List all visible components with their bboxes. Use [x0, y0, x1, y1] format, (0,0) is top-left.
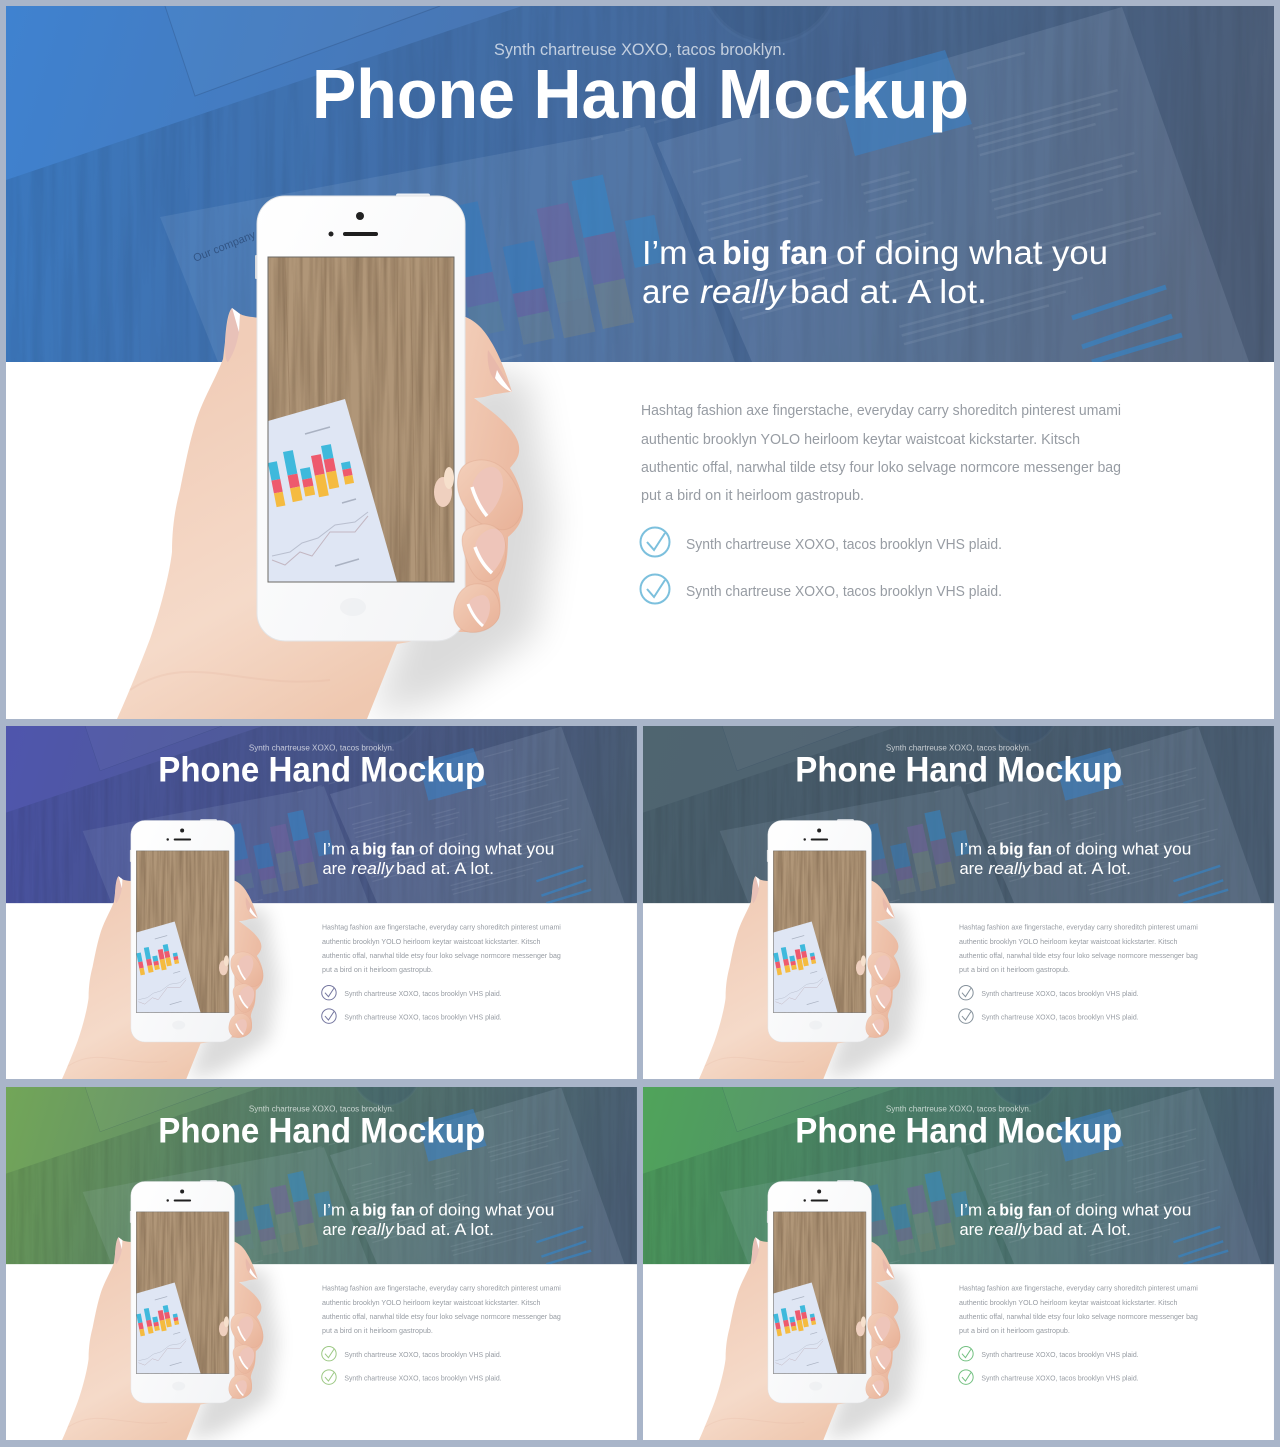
header band: blue gradient: [6, 6, 1274, 362]
fingers: [866, 952, 900, 1038]
header band: olive green gradient: [6, 1087, 637, 1264]
quote heading: big fan: [722, 234, 828, 271]
quote heading: are: [642, 273, 690, 310]
quote heading: bad at. A lot.: [1033, 1221, 1131, 1239]
quote heading: big fan: [362, 840, 415, 858]
body paragraph: authentic offal, narwhal tilde etsy four loko selvage normcore messenger bag: [322, 1312, 561, 1321]
quote heading: bad at. A lot.: [1033, 860, 1131, 878]
checklist item 1: Synth chartreuse XOXO, tacos brooklyn VHS plaid.: [344, 989, 502, 998]
quote heading: bad at. A lot.: [790, 273, 987, 310]
background photo: [643, 726, 1274, 904]
quote heading: big fan: [362, 1201, 415, 1219]
body paragraph: [322, 1284, 561, 1335]
icon: fingers in front: [454, 460, 522, 632]
body paragraph: Hashtag fashion axe fingerstache, everyday carry shoreditch pinterest umami: [641, 403, 1121, 419]
fingers: [229, 1313, 263, 1399]
panel: slate slide: [643, 726, 1274, 1079]
panel: purple slide: [6, 726, 637, 1079]
hand holding back: [61, 1237, 278, 1442]
checklist item 1: [322, 1346, 502, 1361]
title: Phone Hand Mockup: [795, 751, 1122, 790]
document label: Our company: [192, 229, 258, 265]
panel: olive green slide: [6, 1038, 637, 1442]
hand holding back: [698, 876, 915, 1081]
white slide base: [6, 1087, 637, 1442]
quote heading: are: [959, 1221, 983, 1239]
body paragraph: Hashtag fashion axe fingerstache, everyday carry shoreditch pinterest umami: [322, 923, 561, 932]
quote heading: [322, 1201, 554, 1239]
quote heading: bad at. A lot.: [396, 860, 494, 878]
white slide base: [6, 362, 1274, 719]
hand holding back: [61, 876, 278, 1081]
quote heading: of doing what you: [419, 840, 554, 858]
body paragraph: put a bird on it heirloom gastropub.: [959, 965, 1070, 974]
body paragraph: [322, 923, 561, 974]
header band: slate gradient: [643, 726, 1274, 903]
body paragraph: put a bird on it heirloom gastropub.: [322, 1326, 433, 1335]
body paragraph: authentic offal, narwhal tilde etsy four loko selvage normcore messenger bag: [959, 1312, 1198, 1321]
quote heading: big fan: [999, 840, 1052, 858]
subtitle: Synth chartreuse XOXO, tacos brooklyn.: [886, 742, 1031, 752]
phone: [130, 819, 234, 1042]
title: Phone Hand Mockup: [158, 1112, 485, 1151]
checklist item 2: [959, 1009, 1139, 1023]
checklist item 2: [322, 1009, 502, 1023]
quote heading: of doing what you: [419, 1201, 554, 1219]
body paragraph: put a bird on it heirloom gastropub.: [641, 488, 864, 504]
checklist item 2: [322, 1370, 502, 1384]
quote heading: I’m a: [959, 840, 997, 858]
quote heading: [322, 840, 554, 878]
body paragraph: Hashtag fashion axe fingerstache, everyday carry shoreditch pinterest umami: [959, 1284, 1198, 1293]
white slide base: [643, 903, 1274, 1079]
quote heading: I’m a: [322, 840, 360, 858]
quote heading: really: [351, 1221, 396, 1239]
title: Phone Hand Mockup: [312, 55, 969, 133]
panel: main blue slide: [6, 0, 1274, 719]
quote heading: of doing what you: [836, 234, 1108, 271]
quote heading: [642, 234, 1108, 310]
quote heading: I’m a: [959, 1201, 997, 1219]
background photo: [6, 726, 637, 904]
quote heading: [959, 840, 1191, 878]
checklist item 1: [322, 985, 502, 1000]
checklist item 1: [959, 985, 1139, 1000]
body paragraph: authentic brooklyn YOLO heirloom keytar waistcoat kickstarter. Kitsch: [959, 1298, 1177, 1307]
panel: teal green slide: [643, 1038, 1274, 1442]
quote heading: really: [351, 860, 396, 878]
background photo: [6, 1038, 637, 1267]
background photo: desk with documents and bar chart: [6, 0, 1274, 367]
checklist item 1: [959, 1346, 1139, 1361]
checklist item 2: Synth chartreuse XOXO, tacos brooklyn VHS plaid.: [344, 1374, 502, 1383]
body paragraph: [959, 1284, 1198, 1335]
body paragraph: Hashtag fashion axe fingerstache, everyday carry shoreditch pinterest umami: [959, 923, 1198, 932]
quote heading: really: [700, 273, 788, 310]
fingers: [229, 952, 263, 1038]
white slide base: [6, 903, 637, 1079]
icon: hand holding back: [117, 308, 552, 719]
phone: [767, 1180, 871, 1403]
checklist item 2: Synth chartreuse XOXO, tacos brooklyn VHS plaid.: [686, 584, 1002, 600]
quote heading: of doing what you: [1056, 1201, 1191, 1219]
quote heading: are: [322, 1221, 346, 1239]
body paragraph: authentic offal, narwhal tilde etsy four loko selvage normcore messenger bag: [641, 460, 1121, 476]
checklist item 1: Synth chartreuse XOXO, tacos brooklyn VHS plaid.: [686, 537, 1002, 553]
checklist item 2: Synth chartreuse XOXO, tacos brooklyn VHS plaid.: [981, 1013, 1139, 1022]
phone: [130, 1180, 234, 1403]
header band: purple gradient: [6, 726, 637, 903]
body paragraph: authentic brooklyn YOLO heirloom keytar waistcoat kickstarter. Kitsch: [322, 937, 540, 946]
quote heading: I’m a: [642, 234, 717, 271]
checklist item 2: [640, 574, 1002, 604]
fingers: [866, 1313, 900, 1399]
subtitle: Synth chartreuse XOXO, tacos brooklyn.: [249, 742, 394, 752]
background photo: [643, 1038, 1274, 1267]
body paragraph: authentic offal, narwhal tilde etsy four loko selvage normcore messenger bag: [959, 951, 1198, 960]
body paragraph: authentic offal, narwhal tilde etsy four loko selvage normcore messenger bag: [322, 951, 561, 960]
checklist item 2: Synth chartreuse XOXO, tacos brooklyn VHS plaid.: [981, 1374, 1139, 1383]
subtitle: Synth chartreuse XOXO, tacos brooklyn.: [494, 40, 786, 59]
body paragraph: authentic brooklyn YOLO heirloom keytar waistcoat kickstarter. Kitsch: [322, 1298, 540, 1307]
checklist item 2: Synth chartreuse XOXO, tacos brooklyn VHS plaid.: [344, 1013, 502, 1022]
subtitle: Synth chartreuse XOXO, tacos brooklyn.: [886, 1103, 1031, 1113]
quote heading: really: [988, 1221, 1033, 1239]
quote heading: [959, 1201, 1191, 1239]
body paragraph: Hashtag fashion axe fingerstache, everyday carry shoreditch pinterest umami: [322, 1284, 561, 1293]
checklist item 1: Synth chartreuse XOXO, tacos brooklyn VHS plaid.: [981, 989, 1139, 998]
quote heading: big fan: [999, 1201, 1052, 1219]
quote heading: really: [988, 860, 1033, 878]
title: Phone Hand Mockup: [158, 751, 485, 790]
header band: teal green gradient: [643, 1087, 1274, 1264]
quote heading: are: [959, 860, 983, 878]
white slide base: [643, 1087, 1274, 1442]
body paragraph: [641, 403, 1121, 504]
checklist item 1: Synth chartreuse XOXO, tacos brooklyn VHS plaid.: [344, 1350, 502, 1359]
phone: [767, 819, 871, 1042]
body paragraph: authentic brooklyn YOLO heirloom keytar waistcoat kickstarter. Kitsch: [641, 432, 1080, 448]
quote heading: I’m a: [322, 1201, 360, 1219]
checklist item 1: [640, 528, 1002, 556]
quote heading: are: [322, 860, 346, 878]
quote heading: bad at. A lot.: [396, 1221, 494, 1239]
hand holding back: [698, 1237, 915, 1442]
body paragraph: authentic brooklyn YOLO heirloom keytar waistcoat kickstarter. Kitsch: [959, 937, 1177, 946]
body paragraph: put a bird on it heirloom gastropub.: [322, 965, 433, 974]
checklist item 2: [959, 1370, 1139, 1384]
quote heading: of doing what you: [1056, 840, 1191, 858]
subtitle: Synth chartreuse XOXO, tacos brooklyn.: [249, 1103, 394, 1113]
body paragraph: [959, 923, 1198, 974]
title: Phone Hand Mockup: [795, 1112, 1122, 1151]
checklist item 1: Synth chartreuse XOXO, tacos brooklyn VHS plaid.: [981, 1350, 1139, 1359]
icon: phone with chart on screen: [255, 194, 465, 641]
body paragraph: put a bird on it heirloom gastropub.: [959, 1326, 1070, 1335]
